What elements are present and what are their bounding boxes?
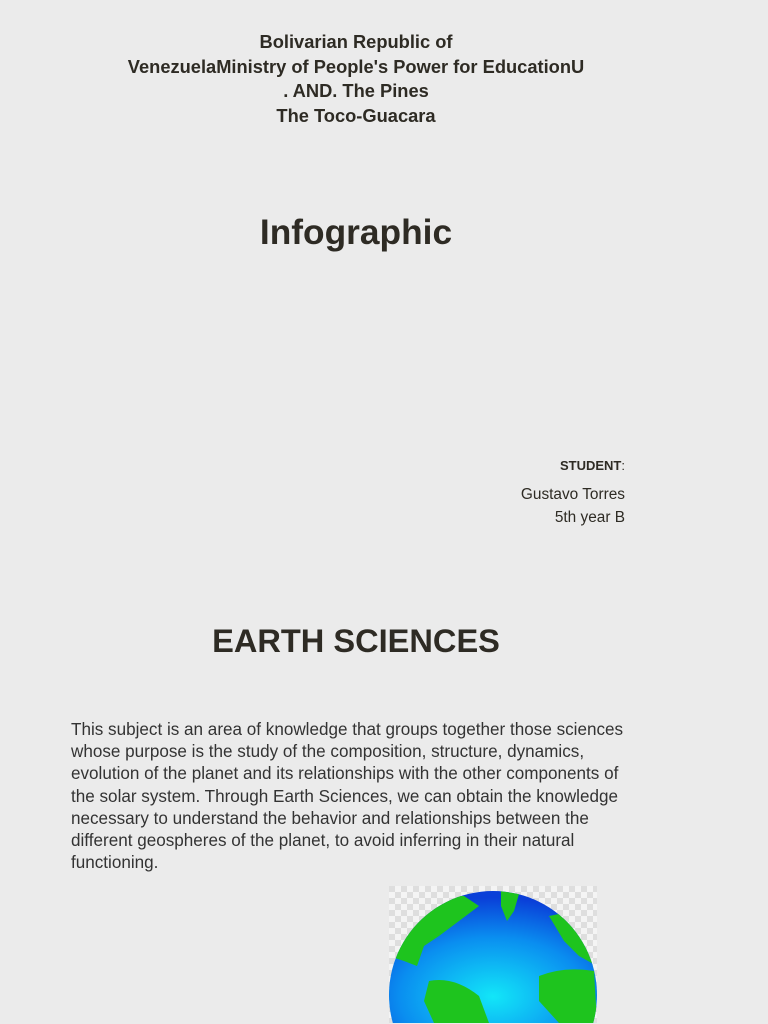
paragraph: functioning.	[71, 853, 158, 872]
paragraph: different geospheres of the planet, to avoid inferring in their natural	[71, 831, 574, 850]
paragraph: the solar system. Through Earth Sciences, we can obtain the knowledge	[71, 787, 618, 806]
title: Infographic	[260, 213, 452, 252]
heading: earth sciences: EARTH SCIENCES	[212, 622, 500, 659]
paragraph: whose purpose is the study of the composition, structure, dynamics,	[71, 742, 584, 761]
student info: Gustavo Torres	[521, 486, 625, 503]
paragraph: This subject is an area of knowledge that groups together those sciences	[71, 720, 623, 739]
paragraph: necessary to understand the behavior and relationships between the	[71, 809, 589, 828]
paragraph	[71, 720, 623, 872]
paragraph: evolution of the planet and its relationships with the other components of	[71, 764, 618, 783]
student info: STUDENT:	[560, 458, 625, 473]
header: institution: VenezuelaMinistry of People's Power for EducationU	[128, 56, 584, 77]
student info	[521, 458, 625, 526]
header: institution: The Toco-Guacara	[276, 105, 436, 126]
header: institution: Bolivarian Republic of	[260, 31, 452, 52]
header: institution	[128, 31, 584, 126]
student info: 5th year B	[555, 509, 625, 526]
icon: globe	[389, 886, 597, 1023]
header: institution: . AND. The Pines	[283, 80, 429, 101]
